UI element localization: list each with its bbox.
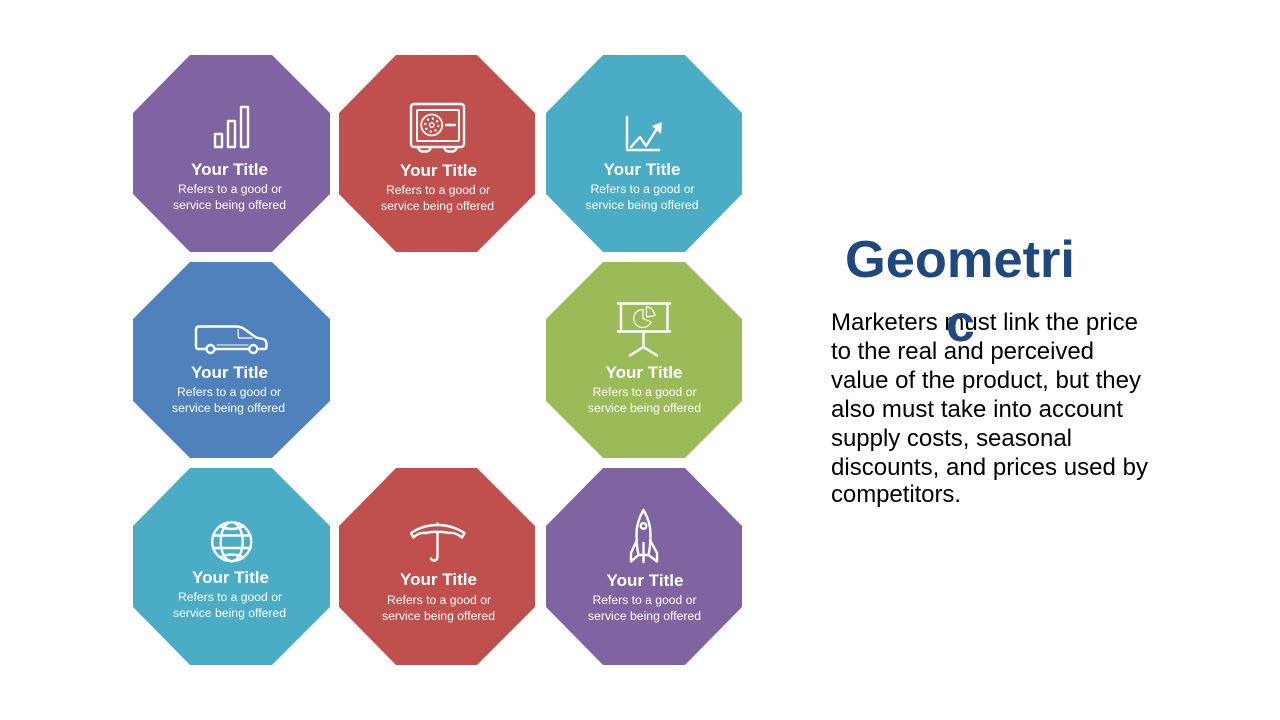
card 7 title: Your Title	[400, 571, 477, 589]
icon: presentation board	[618, 304, 670, 356]
icon: growth chart	[627, 117, 662, 150]
panel: card 3 teal	[546, 55, 742, 252]
panel: card 4 blue	[133, 262, 330, 458]
icon: bar signal	[215, 107, 248, 147]
card 4 description: Refers to a good or	[177, 387, 281, 399]
card 5 description	[588, 387, 701, 415]
card 7 description: service being offered	[382, 611, 495, 623]
panel: card 6 teal	[133, 468, 330, 665]
card 6 description: service being offered	[173, 608, 286, 620]
panel: card 5 green	[546, 262, 742, 458]
body text: discounts, and prices used by	[831, 454, 1148, 481]
card 6 description: Refers to a good or	[178, 592, 282, 604]
card 5 description: service being offered	[588, 403, 701, 415]
heading: c	[946, 295, 975, 353]
card 4 description	[172, 387, 285, 415]
card 4 description: service being offered	[172, 403, 285, 415]
card 1 description	[173, 184, 286, 212]
body text: competitors.	[831, 481, 961, 508]
card 8 description: Refers to a good or	[592, 595, 697, 607]
card 7 description: Refers to a good or	[387, 595, 491, 607]
card 6 title: Your Title	[192, 569, 269, 587]
card 2 title: Your Title	[400, 162, 477, 180]
card 5 description: Refers to a good or	[592, 387, 697, 399]
body text: Marketers must link the price	[831, 309, 1138, 336]
card 5 title: Your Title	[606, 364, 682, 382]
card 3 title: Your Title	[604, 161, 680, 179]
card 4 title: Your Title	[191, 364, 268, 382]
card 7 description	[382, 595, 495, 623]
heading	[845, 231, 1075, 353]
card 2 description: Refers to a good or	[386, 185, 490, 197]
panel: card 7 red	[339, 468, 535, 665]
card 3 description: Refers to a good or	[590, 184, 695, 196]
card 8 title: Your Title	[606, 572, 684, 590]
body text: to the real and perceived	[831, 338, 1094, 365]
card 1 description: service being offered	[173, 200, 286, 212]
card 8 description: service being offered	[588, 611, 701, 623]
body text	[831, 309, 1148, 508]
card 8 description	[588, 595, 701, 623]
icon: rocket	[631, 510, 657, 562]
icon: safe	[411, 104, 464, 152]
panel: card 1 purple	[133, 55, 330, 252]
icon: delivery van	[196, 326, 266, 353]
heading: Geometri	[845, 231, 1075, 289]
card 3 description: service being offered	[586, 200, 698, 212]
body text: also must take into account	[831, 396, 1123, 423]
card 2 description	[381, 185, 494, 213]
card 1 description: Refers to a good or	[178, 184, 282, 196]
card 3 description	[586, 184, 698, 212]
card 2 description: service being offered	[381, 201, 494, 213]
panel: card 2 red	[339, 55, 535, 252]
icon: globe	[212, 522, 251, 561]
card 6 description	[173, 592, 286, 620]
panel: card 8 purple	[546, 468, 742, 665]
card 1 title: Your Title	[191, 161, 268, 179]
icon: umbrella	[411, 524, 464, 560]
body text: supply costs, seasonal	[831, 425, 1072, 452]
body text: value of the product, but they	[831, 367, 1141, 394]
